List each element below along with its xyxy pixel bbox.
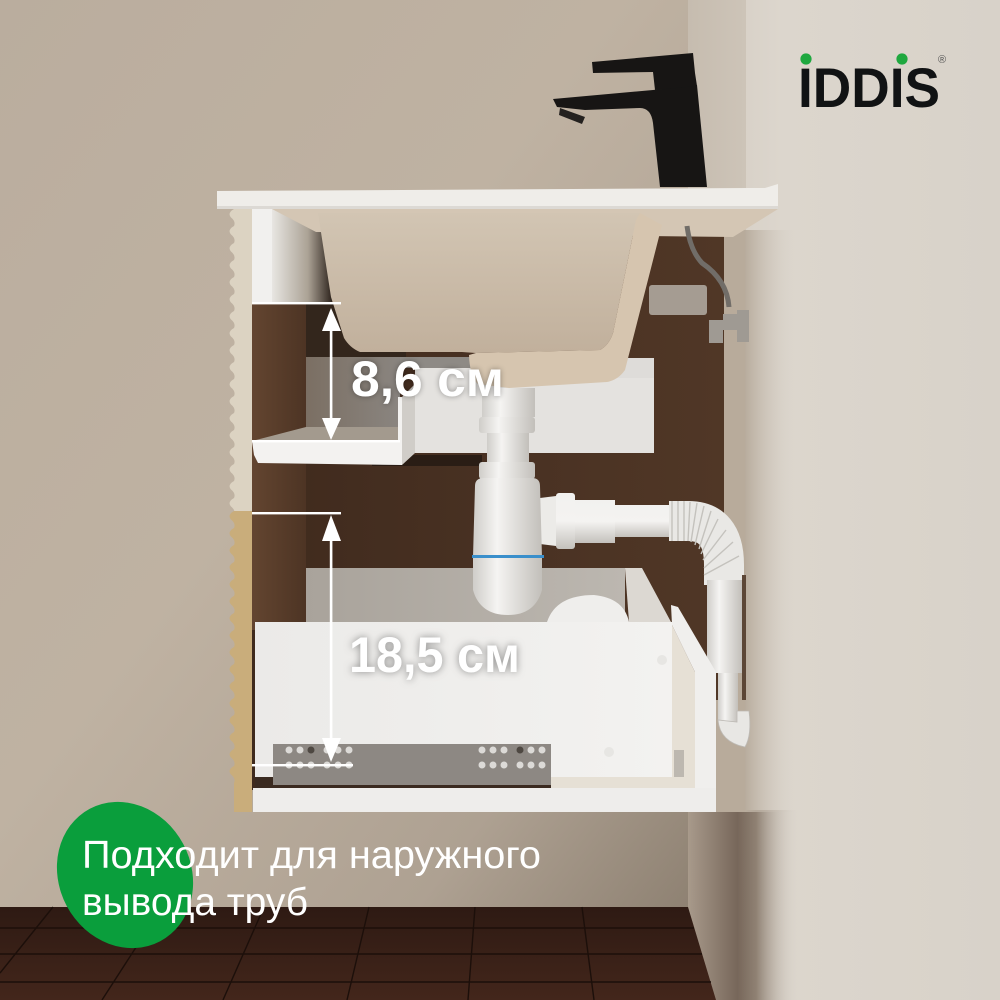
faucet lever <box>592 53 697 90</box>
caption: вывода труб <box>82 881 308 924</box>
bowl inside <box>318 213 640 353</box>
valve <box>709 310 749 343</box>
L frame <box>253 605 716 812</box>
cabinet back panel <box>252 230 724 790</box>
drawer right wall <box>625 568 671 622</box>
floor tiles <box>0 907 716 1000</box>
tray floor <box>252 427 398 441</box>
ball dome in drawer <box>547 595 629 622</box>
front wood edge lower <box>230 511 252 812</box>
dimension label 18,5 cm: 18,5 см <box>349 627 520 683</box>
upper drawer box <box>252 357 654 466</box>
faucet <box>553 53 707 187</box>
sink bowl <box>318 213 662 388</box>
countertop <box>217 184 778 209</box>
white tray behind siphon <box>415 368 654 453</box>
cabinet side panel <box>252 300 306 630</box>
shelf front <box>252 397 402 465</box>
siphon <box>472 388 669 615</box>
lower drawer <box>306 568 671 622</box>
logo dots <box>800 53 908 65</box>
faucet aerator <box>559 108 585 124</box>
caption: Подходит для наружного <box>82 834 541 877</box>
water hose and valve <box>649 226 749 343</box>
corrugated drain pipe <box>669 501 750 747</box>
siphon flask <box>473 478 542 615</box>
logo: IDDIS <box>798 56 940 119</box>
dimension arrow 8,6 cm <box>252 302 400 442</box>
hose <box>687 226 729 307</box>
dark recess under bowl <box>306 303 406 357</box>
bowl cut section <box>469 213 662 388</box>
top left partition <box>252 209 332 303</box>
drawer rail <box>273 744 551 785</box>
wall box <box>649 285 707 315</box>
side wall <box>688 0 1000 1000</box>
green circle <box>32 778 218 972</box>
frame inner face <box>672 625 695 783</box>
dimension label 8,6 cm: 8,6 см <box>351 351 504 407</box>
back wall <box>0 0 690 910</box>
blue ring <box>472 555 544 558</box>
drawer front <box>255 622 672 777</box>
cabinet <box>230 209 778 812</box>
siphon neck <box>482 388 535 417</box>
large drawer and frame <box>253 605 716 812</box>
front wood edge upper <box>230 209 252 515</box>
caption <box>82 834 541 924</box>
registered mark: ® <box>938 54 946 66</box>
drawer back <box>306 568 625 622</box>
dark gap below tray <box>372 455 482 466</box>
dimension arrow 18,5 cm <box>252 512 353 766</box>
screw caps <box>657 655 667 665</box>
vertical outlet pipe <box>707 580 742 673</box>
gray top band <box>400 357 480 368</box>
faucet body <box>553 85 707 187</box>
siphon outlet <box>536 493 669 549</box>
underside of countertop <box>272 209 778 237</box>
